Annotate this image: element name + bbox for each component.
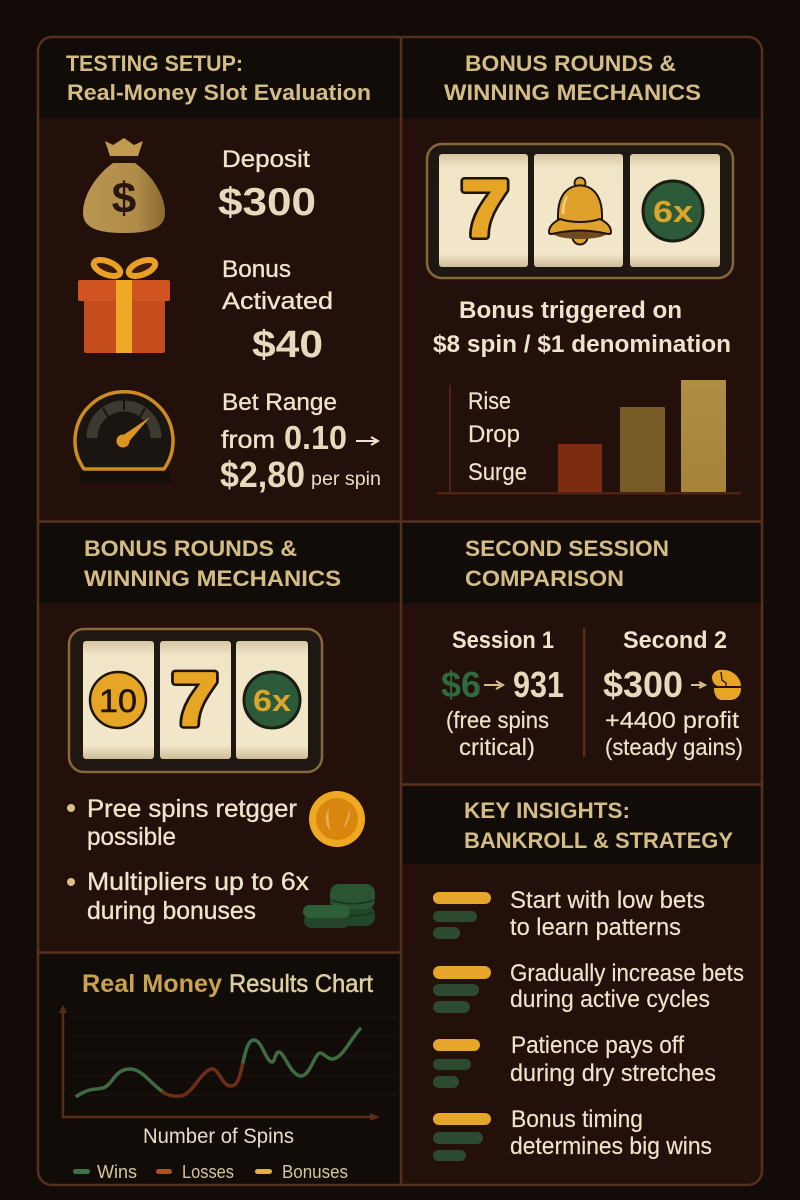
heading: results chart: Results Chart: [229, 970, 373, 998]
legend: Losses: [182, 1162, 234, 1182]
icon: 6x coin: [643, 181, 703, 241]
column: session 2: (steady gains): [605, 734, 743, 760]
panel: results chart: [39, 954, 400, 1185]
heading: testing setup: [66, 51, 371, 105]
text: bonus activated: [222, 256, 333, 366]
column: session 2: +4400 profit: [605, 707, 740, 733]
text: bonus trigger: $8 spin / $1 denomination: [433, 331, 731, 358]
bullet: multipliers: Multipliers up to 6x: [87, 868, 310, 896]
bar chart: rise drop surge: Surge: [468, 459, 527, 486]
text: bonus trigger: [433, 297, 731, 358]
line chart: money over spins: [59, 1005, 395, 1121]
column: session 1: critical): [459, 734, 535, 760]
bar chart: rise drop surge: [437, 380, 741, 494]
insight: bonus timing: determines big wins: [510, 1133, 712, 1160]
slot machine: ten seven multiplier: [69, 629, 322, 772]
bullet: free spins: possible: [87, 823, 176, 851]
column: session 1: 931: [513, 664, 564, 705]
icon: money bag: $: [112, 174, 136, 223]
text: bonus activated: Activated: [222, 288, 333, 315]
heading: second session: SECOND SESSION: [465, 536, 669, 561]
text: bonus trigger: Bonus triggered on: [459, 297, 682, 324]
column: session 1: (free spins: [446, 707, 549, 733]
icon: lucky seven: 7: [461, 164, 509, 253]
icon: gold pouch: [712, 670, 741, 700]
legend: Bonuses: [282, 1162, 348, 1182]
column: session 2: $300: [603, 664, 683, 705]
heading: bonus rounds: [444, 51, 701, 105]
bullet: multipliers: during bonuses: [87, 897, 256, 925]
heading: key insights: [464, 798, 733, 853]
text: bet range: Bet Range: [222, 389, 337, 416]
icon: lucky seven: 7: [461, 164, 509, 253]
text: bonus activated: $40: [252, 324, 323, 366]
insight: increase bets: [433, 960, 744, 1013]
icon: 10 coin: [90, 672, 146, 728]
text: bet range: 0.10: [284, 419, 347, 456]
heading: bonus rounds lower: BONUS ROUNDS &: [84, 536, 297, 561]
icon: money bag: [83, 138, 165, 233]
heading: bonus rounds: BONUS ROUNDS &: [465, 51, 676, 76]
insight: increase bets: Gradually increase bets: [510, 960, 744, 987]
icon: 6x coin: 6x: [653, 194, 694, 229]
text: bet range: from: [221, 426, 275, 454]
heading: second session: COMPARISON: [465, 566, 624, 591]
axis label: Number of Spins: [143, 1125, 294, 1148]
column: session 1: Session 1: [452, 627, 554, 654]
heading: results chart: [82, 970, 373, 998]
insight: patience: during dry stretches: [510, 1060, 716, 1087]
icon: bell: [549, 178, 611, 244]
panel: second session comparison: [402, 523, 762, 760]
insight: bonus timing: [433, 1106, 712, 1161]
insight: low bets: [433, 887, 705, 941]
text: bet range: $2,80: [220, 454, 305, 495]
text: deposit: Deposit: [222, 146, 310, 173]
panel: bonus rounds top right: [402, 38, 762, 494]
text: bet range: [220, 389, 381, 495]
bullet: multipliers: [67, 868, 310, 925]
column: session 1: $6: [441, 664, 481, 705]
icon: speed gauge: [75, 392, 173, 483]
bar chart: rise drop surge: Drop: [468, 421, 520, 448]
heading: second session: [465, 536, 669, 591]
bullet: free spins: [67, 795, 297, 851]
panel: bonus rounds lower left: [39, 523, 400, 928]
text: bonus activated: Bonus: [222, 256, 291, 283]
icon: lucky seven: 7: [172, 658, 218, 741]
column: session 1: [441, 627, 564, 760]
text: bet range: per spin: [311, 469, 381, 490]
heading: key insights: BANKROLL & STRATEGY: [464, 828, 733, 853]
text: deposit: [218, 146, 316, 224]
column: session 2: [603, 627, 743, 760]
text: deposit: $300: [218, 181, 316, 224]
icon: gift box: [78, 257, 170, 353]
panel: key insights: [402, 786, 762, 1161]
panel: testing setup: [39, 38, 400, 495]
heading: testing setup: TESTING SETUP:: [66, 51, 243, 76]
heading: testing setup: Real-Money Slot Evaluation: [67, 80, 371, 105]
column: session 2: Second 2: [623, 627, 727, 654]
heading: bonus rounds lower: [84, 536, 341, 591]
bullet: free spins: Pree spins retgger: [87, 795, 297, 823]
legend: Wins: [97, 1162, 137, 1182]
heading: key insights: KEY INSIGHTS:: [464, 798, 630, 823]
heading: results chart: Real Money: [82, 970, 222, 998]
legend: [73, 1162, 348, 1182]
icon: green chips: [303, 884, 375, 928]
insight: increase bets: during active cycles: [510, 986, 710, 1013]
insight: patience: [433, 1032, 716, 1088]
icon: 6x coin: [244, 672, 300, 728]
icon: 10 coin: 10: [99, 683, 137, 719]
icon: gold coin: [309, 791, 365, 847]
icon: 6x coin: 6x: [253, 683, 292, 718]
insight: patience: Patience pays off: [511, 1032, 684, 1059]
heading: bonus rounds: WINNING MECHANICS: [444, 80, 701, 105]
insight: bonus timing: Bonus timing: [511, 1106, 643, 1133]
slot machine: seven bell multiplier: [427, 144, 733, 278]
heading: bonus rounds lower: WINNING MECHANICS: [84, 566, 341, 591]
icon: lucky seven: 7: [172, 658, 218, 741]
bar chart: rise drop surge: Rise: [468, 388, 511, 415]
insight: low bets: Start with low bets: [510, 887, 705, 914]
insight: low bets: to learn patterns: [510, 914, 681, 941]
